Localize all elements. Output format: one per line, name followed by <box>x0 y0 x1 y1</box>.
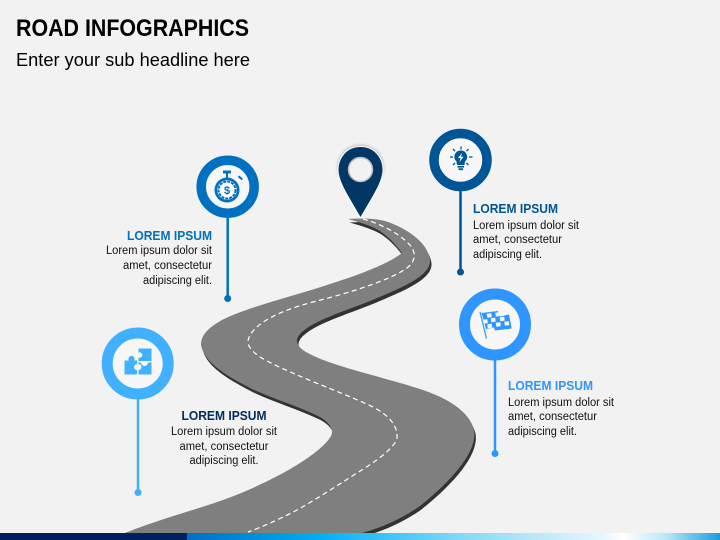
text block 2: Lorem ipsum dolor sit <box>171 426 278 438</box>
icon: stopwatch with dollar <box>214 170 243 202</box>
ring <box>201 160 254 213</box>
marker 3: light bulb <box>434 134 487 276</box>
ring <box>107 333 168 394</box>
text block 1: LOREM IPSUM <box>127 228 212 243</box>
text block 2: amet, consectetur <box>180 441 269 453</box>
connector <box>137 395 139 492</box>
text block 2 <box>171 408 278 467</box>
text block 2: LOREM IPSUM <box>182 408 266 423</box>
text block 3: LOREM IPSUM <box>473 201 558 216</box>
road surface <box>125 218 474 533</box>
icon: checkered flag <box>480 311 512 338</box>
subtitle: Enter your sub headline here <box>16 50 250 70</box>
text block 1: Lorem ipsum dolor sit <box>106 245 213 257</box>
text block 4: amet, consectetur <box>508 411 597 423</box>
text block 1: adipiscing elit. <box>143 275 212 287</box>
marker 1: stopwatch <box>201 160 254 302</box>
location pin <box>337 144 384 218</box>
icon: stopwatch with dollar: $ <box>224 185 230 197</box>
connector <box>226 215 229 298</box>
text block 3: amet, consectetur <box>473 234 562 246</box>
icon: puzzle pieces <box>124 348 152 374</box>
marker 4: checkered flag <box>464 294 526 457</box>
ring <box>434 134 487 186</box>
marker 2: puzzle <box>107 333 168 496</box>
icon: light bulb <box>450 146 472 170</box>
bottom colour bar <box>0 533 720 540</box>
pin hole <box>348 158 372 182</box>
road shadow <box>126 222 476 536</box>
text block 2: adipiscing elit. <box>190 455 258 467</box>
text block 4 <box>508 378 615 438</box>
text block 4: Lorem ipsum dolor sit <box>508 397 615 409</box>
connector <box>494 355 496 453</box>
ring <box>464 294 526 355</box>
text block 3: adipiscing elit. <box>473 249 542 261</box>
text block 3 <box>473 201 580 261</box>
pin halo <box>337 144 384 200</box>
connector <box>459 188 462 272</box>
text block 3: Lorem ipsum dolor sit <box>473 220 580 232</box>
text block 1 <box>106 228 213 287</box>
winding road <box>125 218 476 536</box>
title: ROAD INFOGRAPHICS <box>16 15 249 42</box>
text block 1: amet, consectetur <box>123 260 212 272</box>
text block 4: adipiscing elit. <box>508 426 577 438</box>
road centre dashes <box>248 219 414 532</box>
text block 4: LOREM IPSUM <box>508 378 593 393</box>
pin body <box>338 146 383 218</box>
